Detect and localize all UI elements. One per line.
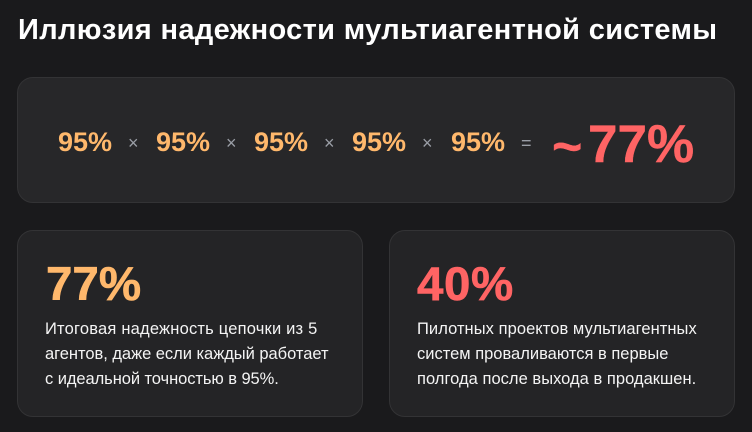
formula result: ~	[552, 118, 582, 176]
panel: formula	[17, 77, 735, 203]
multiply sign 1: ×	[128, 133, 139, 153]
failed pilots text: систем проваливаются в первые	[417, 345, 668, 363]
formula value 4: 95%	[352, 127, 406, 157]
failed pilots text: Пилотных проектов мультиагентных	[417, 320, 697, 338]
panel: chain reliability	[17, 230, 363, 417]
multiply sign 2: ×	[226, 133, 237, 153]
failed pilots text: полгода после выхода в продакшен.	[417, 370, 696, 388]
multiply sign 3: ×	[324, 133, 335, 153]
equals sign: =	[521, 133, 532, 153]
chain reliability text: с идеальной точностью в 95%.	[45, 370, 279, 388]
title: Иллюзия надежности мультиагентной системы	[18, 14, 717, 46]
formula value 5: 95%	[451, 127, 505, 157]
stat: 40%: 40%	[417, 258, 514, 311]
chain reliability text: агентов, даже если каждый работает	[45, 345, 328, 363]
formula value 1: 95%	[58, 127, 112, 157]
formula result: 77%	[588, 115, 694, 174]
chain reliability text	[45, 320, 328, 388]
multiply sign 4: ×	[422, 133, 433, 153]
stat: 77%: 77%	[46, 258, 141, 311]
formula value 3: 95%	[254, 127, 308, 157]
failed pilots text	[417, 320, 697, 388]
panel: failed pilots	[389, 230, 735, 417]
chain reliability text: Итоговая надежность цепочки из 5	[45, 320, 318, 338]
formula value 2: 95%	[156, 127, 210, 157]
